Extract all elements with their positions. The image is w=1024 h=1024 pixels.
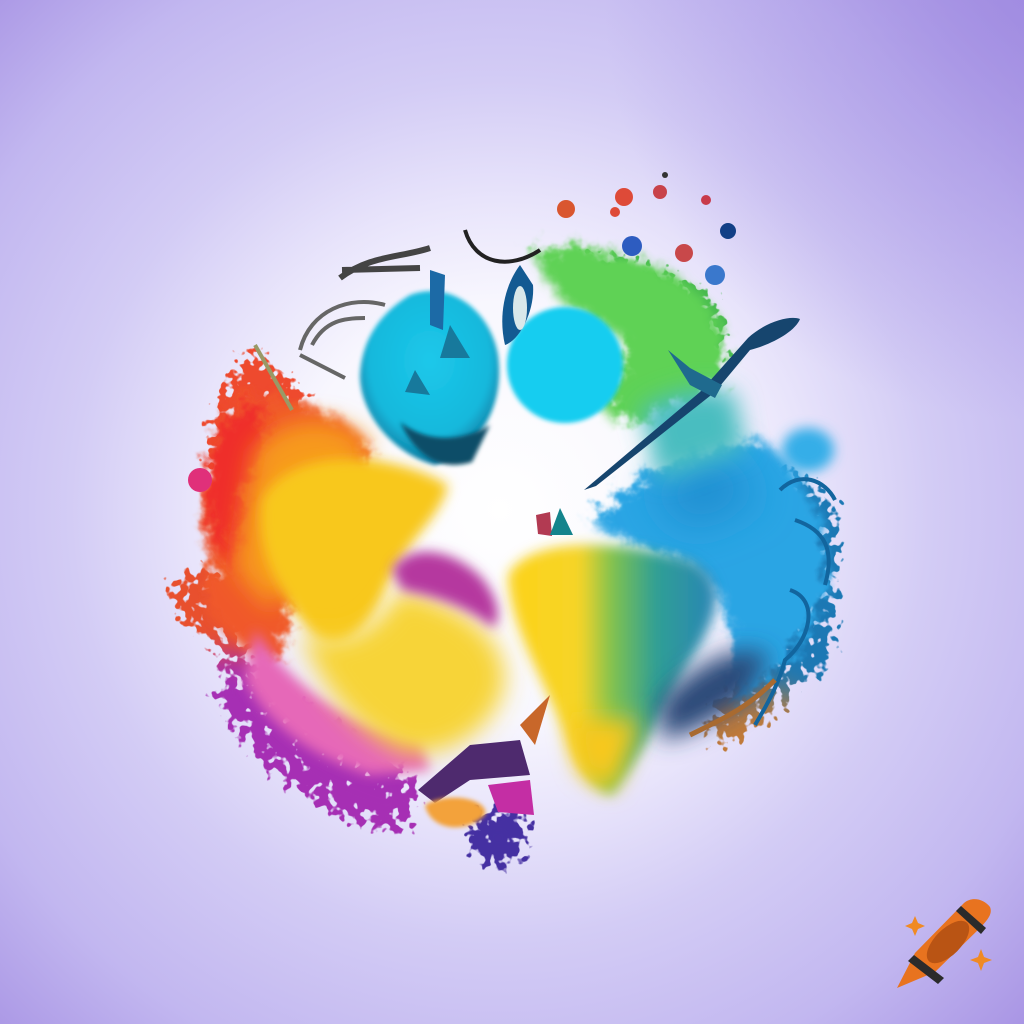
pink dots on the left [188, 468, 212, 492]
panel: yellow left lobe [261, 459, 448, 643]
panel: splatter ring [150, 225, 850, 880]
icon: cyan left fruit [360, 270, 499, 465]
panel: yellow to teal right pear [508, 545, 770, 795]
panel: red and orange left splash [204, 395, 370, 661]
icon: small leaf at centre [536, 508, 573, 536]
icon: bottom purple brush [418, 695, 550, 827]
icon: sketched lines top-left [255, 230, 540, 410]
panel: green top splash [530, 247, 745, 480]
panel: blue right splash [590, 428, 834, 705]
top scattered dots [557, 172, 736, 285]
panel: yellow-pink lower lobe [300, 552, 505, 753]
icon: paintbrush [584, 318, 800, 490]
icon: crayon logo [897, 899, 992, 988]
panel: pink purple lower-left splash [245, 630, 430, 775]
dark blue ink lines right [690, 479, 835, 735]
icon: cyan right circle [502, 265, 623, 423]
